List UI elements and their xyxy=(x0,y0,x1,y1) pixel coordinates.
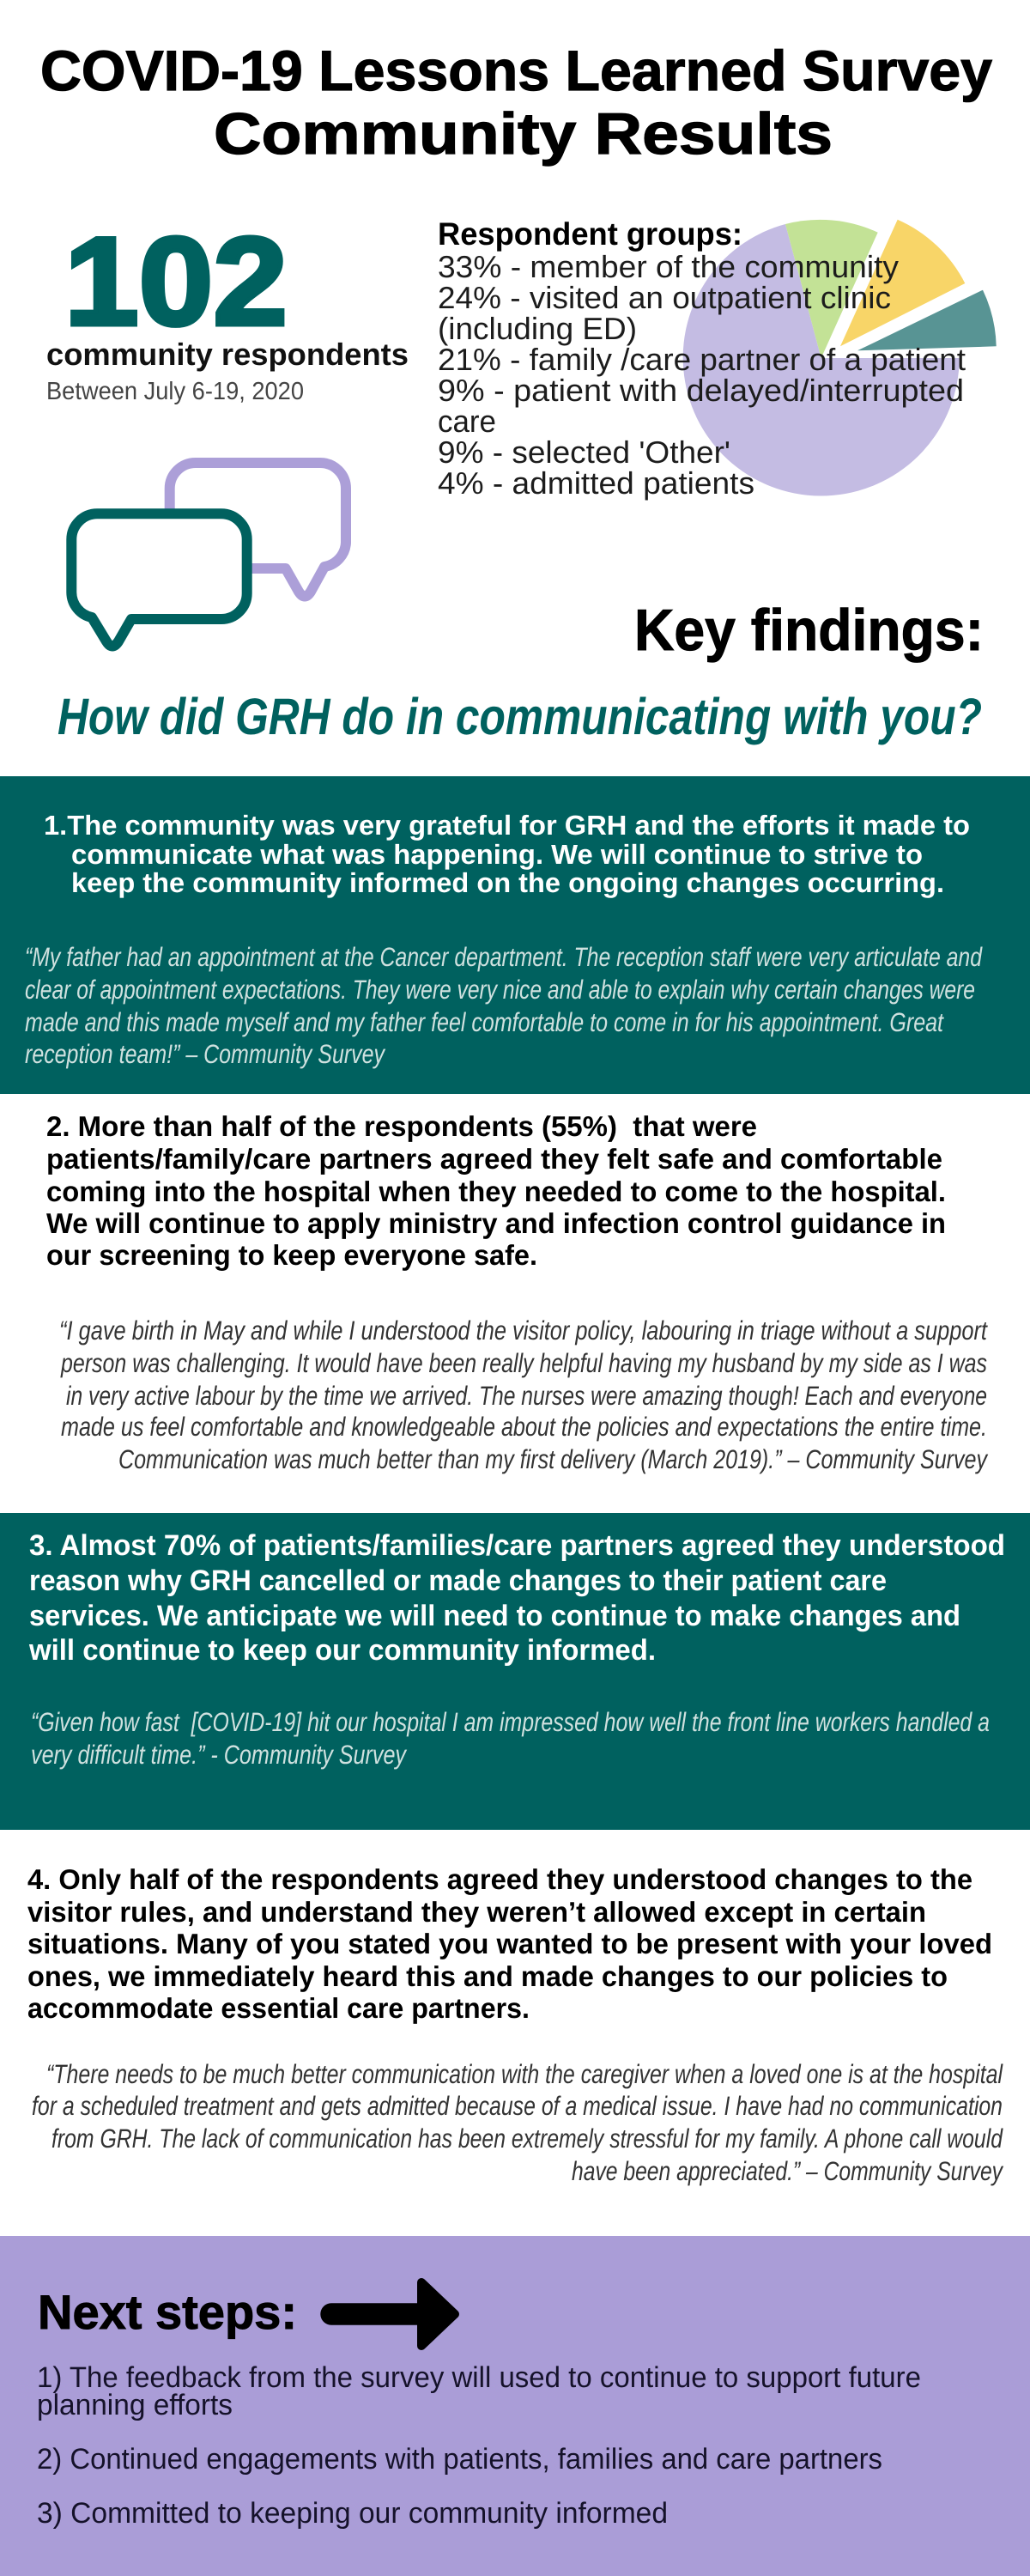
respondent groups list: 24% - visited an outpatient clinic xyxy=(438,280,891,315)
finding 2 text: We will continue to apply ministry and infection control guidance in xyxy=(46,1207,946,1239)
finding 2 text: our screening to keep everyone safe. xyxy=(46,1239,537,1271)
respondent groups list: (including ED) xyxy=(438,311,637,346)
panel: next steps: Next steps: xyxy=(38,2285,297,2339)
panel: finding 1: communicate what was happening. We will continue to strive to xyxy=(71,839,923,870)
panel: next steps: 2) Continued engagements with patients, families and care partners xyxy=(37,2443,882,2476)
respondent groups list: 33% - member of the community xyxy=(438,249,899,284)
respondent groups list: 9% - selected 'Other' xyxy=(438,434,730,470)
quote: finding 2 xyxy=(59,1315,989,1474)
finding 4 text: accommodate essential care partners. xyxy=(27,1992,530,2024)
stat: 102 community respondents: community respondents xyxy=(46,337,409,372)
finding 4 text: ones, we immediately heard this and made changes to our policies to xyxy=(27,1960,948,1992)
panel: finding 3: reason why GRH cancelled or made changes to their patient care xyxy=(29,1564,887,1597)
panel: finding 3 xyxy=(0,1513,1030,1830)
panel: finding 3: very difficult time.” - Community Survey xyxy=(31,1740,408,1770)
pie chart: respondent groups xyxy=(683,220,997,496)
panel: finding 3: 3. Almost 70% of patients/families/care partners agreed they understood xyxy=(29,1529,1005,1562)
respondent groups list xyxy=(438,216,966,501)
stat: 102 community respondents: 102 xyxy=(64,211,288,351)
panel: finding 1: reception team!” – Community Survey xyxy=(25,1039,386,1069)
panel: next steps: 1) The feedback from the survey will used to continue to support future xyxy=(37,2361,921,2394)
finding 4 text: situations. Many of you stated you wanted to be present with your loved xyxy=(27,1928,992,1959)
respondent groups list: care xyxy=(438,404,496,439)
panel: finding 1: keep the community informed on the ongoing changes occurring. xyxy=(71,867,944,898)
panel: next steps xyxy=(0,2236,1030,2576)
finding 2 text: coming into the hospital when they needed to come to the hospital. xyxy=(46,1176,946,1207)
panel: next steps: 3) Committed to keeping our community informed xyxy=(37,2497,668,2530)
finding 4 text: 4. Only half of the respondents agreed they understood changes to the xyxy=(27,1863,972,1895)
panel: next steps: planning efforts xyxy=(37,2389,233,2421)
panel: finding 3: services. We anticipate we will need to continue to make changes and xyxy=(29,1600,960,1632)
respondent groups list: 4% - admitted patients xyxy=(438,465,754,501)
respondent groups list: 21% - family /care partner of a patient xyxy=(438,342,966,377)
finding 2 text: patients/family/care partners agreed they felt safe and comfortable xyxy=(46,1143,942,1175)
icon: speech bubbles xyxy=(71,463,346,646)
finding 4 text xyxy=(27,1863,992,2024)
quote: finding 4 xyxy=(32,2059,1004,2186)
icon: arrow xyxy=(320,2282,455,2346)
respondent groups list: 9% - patient with delayed/interrupted xyxy=(438,373,964,408)
finding 2 text: 2. More than half of the respondents (55%) that were xyxy=(46,1110,757,1142)
finding 4 text: visitor rules, and understand they weren’t allowed except in certain xyxy=(27,1896,926,1928)
panel: finding 1: 1.The community was very grateful for GRH and the efforts it made to xyxy=(44,810,970,841)
title: COVID-19 Lessons Learned Survey xyxy=(40,39,992,102)
finding 2 text xyxy=(46,1110,946,1271)
title xyxy=(40,39,992,167)
stat: 102 community respondents: Between July 6-19, 2020 xyxy=(46,378,304,405)
panel: finding 3: will continue to keep our community informed. xyxy=(28,1634,656,1667)
stat: 102 community respondents xyxy=(46,211,409,405)
heading: key findings: Key findings: xyxy=(634,598,984,663)
panel: finding 1 xyxy=(0,776,1030,1094)
respondent groups list: Respondent groups: xyxy=(438,216,742,252)
title: Community Results xyxy=(214,101,833,167)
